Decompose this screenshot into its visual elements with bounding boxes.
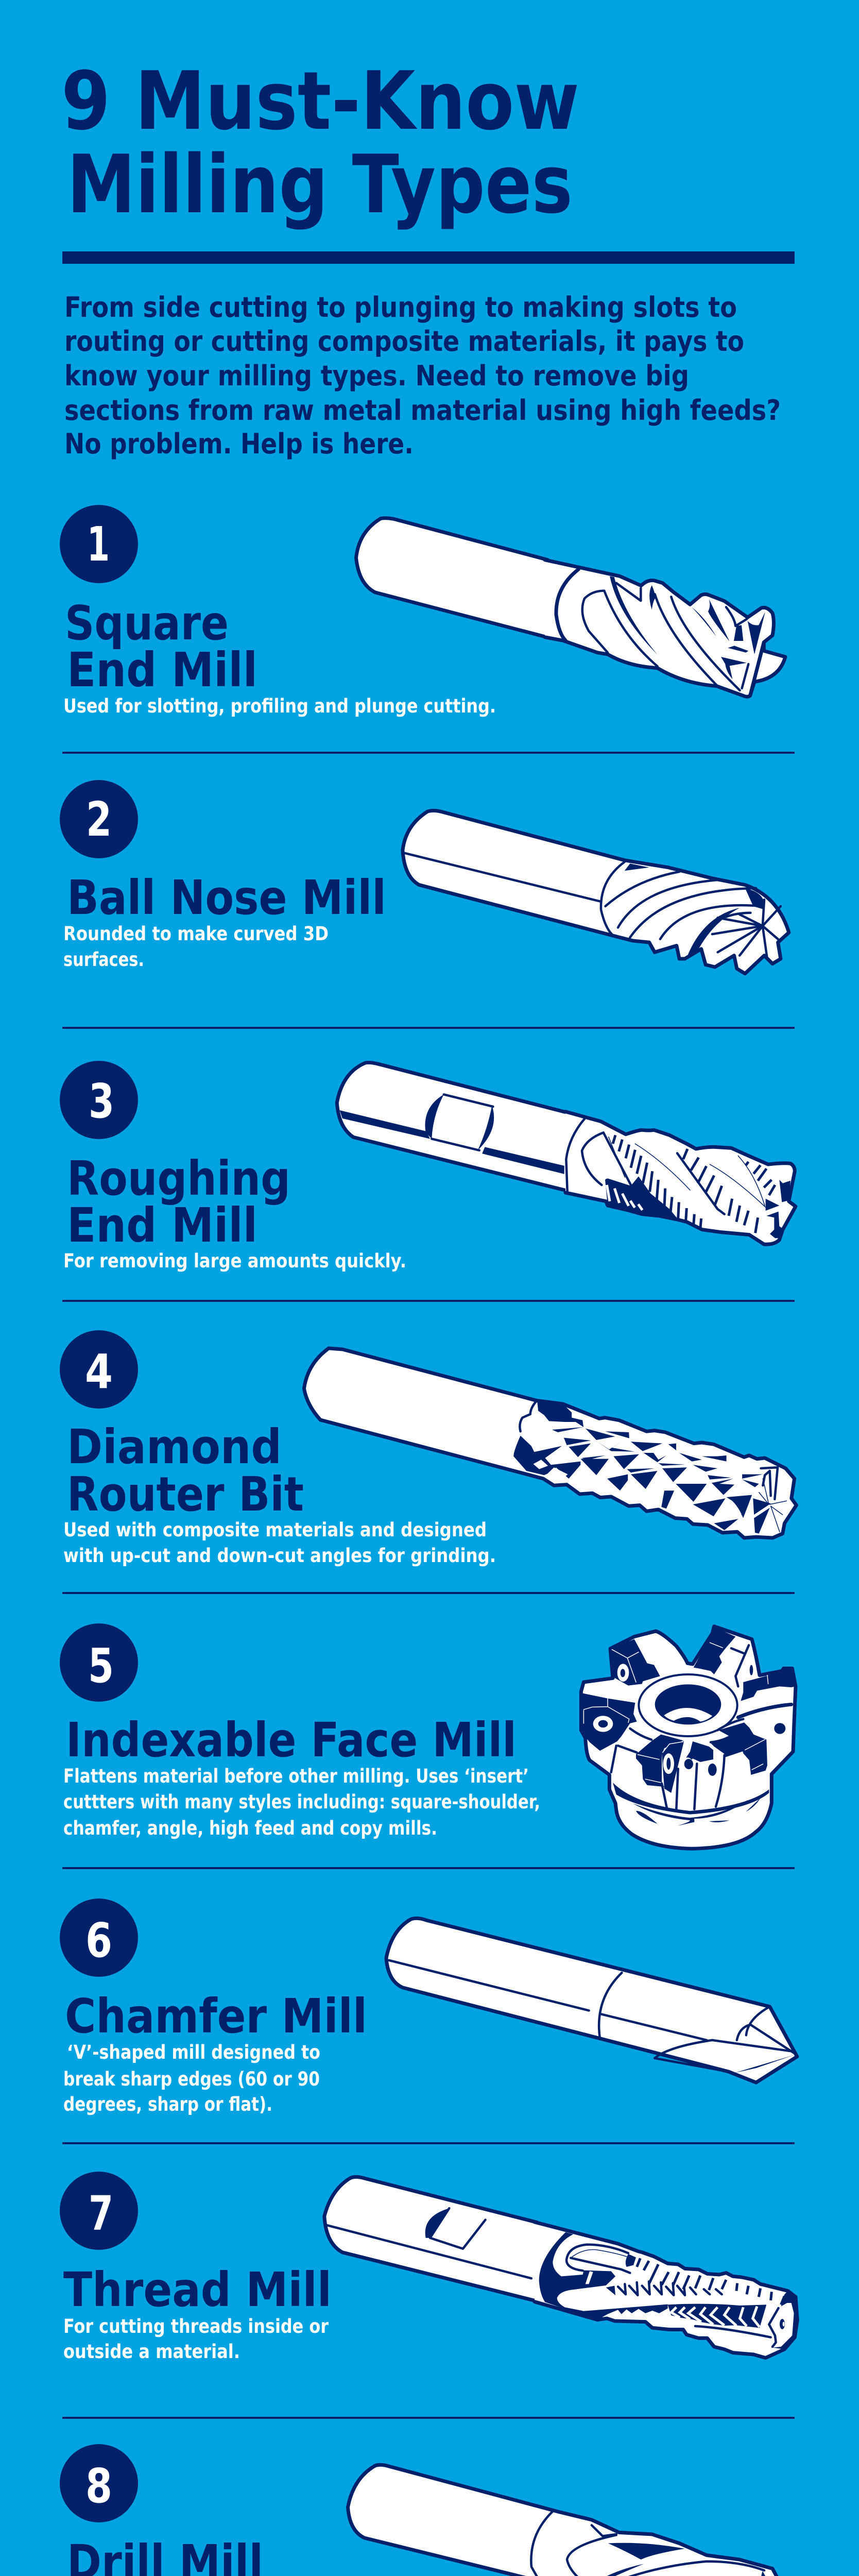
number badge 1 [60, 505, 138, 583]
section 4: diamond router bit [60, 1330, 796, 1567]
intro text: routing or cutting composite materials, it pays to [64, 325, 744, 358]
divider [62, 2142, 795, 2144]
description: break sharp edges (60 or 90 [63, 2068, 320, 2090]
section 8: drill mill [60, 2444, 795, 2576]
heading: roughing end mill: Roughing [67, 1151, 290, 1206]
number badge 4 [60, 1330, 138, 1409]
left insert [581, 1693, 637, 1751]
title [61, 54, 579, 231]
number badge 5 [60, 1623, 138, 1702]
number badge 3: 3 [89, 1074, 114, 1129]
section 6: chamfer mill [60, 1899, 797, 2115]
icon: square end mill [356, 518, 785, 697]
front insert [636, 1735, 684, 1793]
intro text [64, 291, 781, 460]
heading: thread mill: Thread Mill [63, 2262, 332, 2317]
title: 9 Must-Know [61, 54, 579, 148]
heading: square end mill [65, 596, 257, 698]
heading: diamond router bit: Diamond [67, 1419, 282, 1475]
icon: drill mill [348, 2465, 795, 2576]
number badge 6 [60, 1899, 138, 1977]
heading: square end mill: End Mill [67, 642, 257, 698]
description: surfaces. [63, 948, 144, 971]
number badge 2: 2 [86, 792, 112, 847]
heading: square end mill: Square [65, 596, 229, 651]
divider [62, 1592, 795, 1594]
intro text: From side cutting to plunging to making slots to [64, 291, 737, 324]
section 5: indexable face mill [60, 1623, 796, 1849]
divider [62, 752, 795, 754]
heading: chamfer mill: Chamfer Mill [65, 1989, 367, 2044]
description: chamfer, angle, high feed and copy mills. [63, 1817, 437, 1839]
description: For removing large amounts quickly. [63, 1250, 406, 1272]
divider [62, 2417, 795, 2419]
right insert [741, 1668, 796, 1701]
description [63, 923, 329, 971]
intro text: know your milling types. Need to remove big [64, 360, 689, 392]
number badge 5: 5 [88, 1638, 114, 1693]
heading: indexable face mill: Indexable Face Mill [66, 1713, 517, 1768]
heading: ball nose mill: Ball Nose Mill [67, 870, 386, 925]
title: Milling Types [67, 138, 573, 231]
number badge 3 [60, 1061, 138, 1139]
description [63, 2315, 329, 2363]
number badge 8 [60, 2444, 138, 2522]
description [63, 1519, 496, 1567]
section 3: roughing end mill [60, 1061, 796, 1272]
title rule [62, 251, 795, 264]
heading: roughing end mill: End Mill [67, 1198, 257, 1253]
heading: diamond router bit: Router Bit [67, 1467, 304, 1522]
description: Rounded to make curved 3D [63, 923, 329, 945]
divider [62, 1300, 795, 1302]
centre ring and bore [639, 1674, 737, 1736]
divider [62, 1027, 795, 1029]
description: outside a material. [63, 2341, 240, 2363]
number badge 1: 1 [87, 517, 110, 572]
description [63, 2041, 320, 2115]
icon: chamfer mill [386, 1918, 797, 2082]
number badge 4: 4 [85, 1344, 113, 1399]
intro text: No problem. Help is here. [64, 428, 414, 460]
icon: ball nose mill [403, 810, 789, 974]
heading: roughing end mill [67, 1151, 290, 1253]
icon: roughing end mill [337, 1062, 796, 1244]
description: For cutting threads inside or [63, 2315, 329, 2337]
section 7: thread mill [60, 2172, 797, 2363]
description: degrees, sharp or flat). [63, 2093, 272, 2115]
description: ‘V’-shaped mill designed to [67, 2041, 320, 2063]
number badge 7 [60, 2172, 138, 2250]
description [63, 1765, 540, 1839]
body details [611, 1704, 792, 1826]
description: with up-cut and down-cut angles for grinding. [63, 1545, 496, 1567]
intro text: sections from raw metal material using high feeds? [64, 394, 781, 427]
section 1: square end mill [60, 505, 785, 717]
description: Used with composite materials and designed [63, 1519, 487, 1541]
number badge 8: 8 [85, 2459, 112, 2514]
heading: diamond router bit [67, 1419, 304, 1522]
number badge 6: 6 [85, 1913, 112, 1968]
section 2: ball nose mill [60, 780, 789, 974]
icon: indexable face mill [581, 1626, 796, 1849]
number badge 2 [60, 780, 138, 858]
description: cuttters with many styles including: square-shoulder, [63, 1791, 540, 1813]
top-right insert [694, 1627, 753, 1686]
description: Flattens material before other milling. Uses ‘insert’ [63, 1765, 529, 1787]
description: Used for slotting, profiling and plunge cutting. [63, 695, 496, 717]
divider [62, 1867, 795, 1869]
icon: diamond router bit [304, 1348, 796, 1538]
number badge 7: 7 [89, 2186, 113, 2241]
icon: thread mill [324, 2177, 797, 2358]
top-left insert [610, 1639, 660, 1686]
